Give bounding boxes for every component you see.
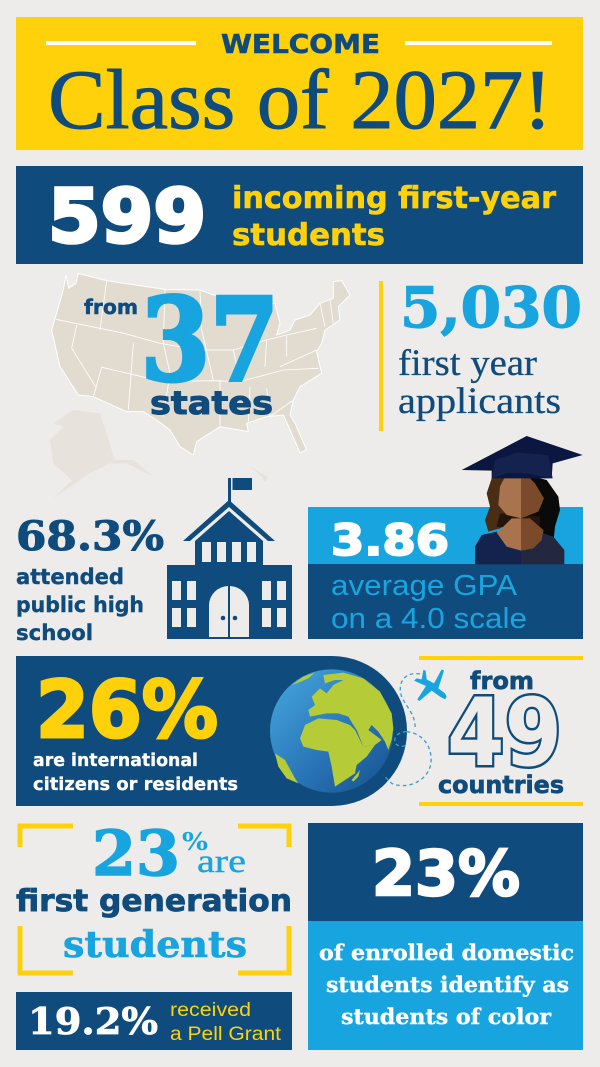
text: received a Pell Grant: received <box>170 1000 251 1021</box>
map: Hawaii <box>249 465 268 482</box>
text: of enrolled domestic students identify as students of color: students of color <box>341 1004 552 1029</box>
text: of enrolled domestic students identify as students of color <box>319 940 574 1029</box>
stat: 37: 37 <box>141 273 279 407</box>
panel: students of color <box>308 823 583 1050</box>
text: attended public high school: attended <box>16 565 124 589</box>
panel: first generation <box>16 817 292 973</box>
stat: 49 outlined: 49 <box>447 679 562 788</box>
text: incoming first-year students <box>232 181 556 253</box>
divider: applicants rule <box>379 281 383 431</box>
icon: globe <box>270 669 393 793</box>
text: from: from <box>84 295 138 319</box>
text: first year applicants: applicants <box>398 381 561 422</box>
stat: 3.86: 3.86 <box>331 516 449 566</box>
text: are: are <box>197 844 246 880</box>
text: are international citizens or residents: citizens or residents <box>33 774 238 795</box>
text: countries: countries <box>438 771 564 799</box>
stat: 68.3%: 68.3% <box>16 513 164 560</box>
frame: yellow brackets <box>20 826 289 973</box>
panel: public high school <box>16 478 292 645</box>
icon: graduate student <box>462 436 583 564</box>
panel: 599 incoming students <box>16 166 583 264</box>
text: attended public high school <box>16 565 144 645</box>
icon: airplane <box>414 669 447 701</box>
panel: 5,030 applicants <box>398 275 582 422</box>
stat: 23%: 23% <box>372 837 520 910</box>
text: received a Pell Grant <box>170 1000 282 1045</box>
map: United States <box>52 273 350 455</box>
panel: title banner <box>16 17 583 150</box>
panel: 49 countries <box>419 656 583 806</box>
icon: dashed flight path <box>383 674 431 786</box>
text: first year applicants <box>398 343 561 422</box>
text: incoming first-year students: students <box>232 218 385 253</box>
text: from: from <box>470 667 534 695</box>
map: Alaska <box>50 410 153 498</box>
panel: international citizens <box>16 656 407 806</box>
stat: 5,030: 5,030 <box>400 275 582 341</box>
text: average GPA on a 4.0 scale <box>331 570 527 635</box>
panel: Pell Grant <box>16 992 292 1050</box>
title: class of 2027: Class of 2027! <box>48 53 552 147</box>
text: incoming first-year students: incoming first-year <box>232 181 556 216</box>
text: of enrolled domestic students identify as students of color: of enrolled domestic <box>319 940 574 965</box>
text: attended public high school: public high <box>16 593 144 617</box>
text: average GPA on a 4.0 scale: average GPA <box>331 570 518 602</box>
stat: 599: 599 <box>48 174 206 260</box>
text: received a Pell Grant: a Pell Grant <box>170 1024 282 1045</box>
panel: first generation: % <box>182 827 208 856</box>
panel: 37 states map <box>50 273 350 498</box>
stat: 23%: 23 <box>92 817 180 890</box>
text: average GPA on a 4.0 scale: on a 4.0 scale <box>331 603 527 635</box>
text: of enrolled domestic students identify as students of color: students identify as <box>326 972 569 997</box>
icon: school building <box>167 478 292 639</box>
text: are international citizens or residents: are international <box>33 750 198 771</box>
stat: 19.2%: 19.2% <box>28 1001 158 1043</box>
text: states: states <box>150 384 273 422</box>
text: are international citizens or residents <box>33 750 238 795</box>
text: attended public high school: school <box>16 621 93 645</box>
panel: average GPA <box>308 436 583 639</box>
text: students: students <box>63 924 247 966</box>
text: first year applicants: first year <box>398 343 537 384</box>
stat: 26%: 26% <box>36 666 218 756</box>
text: first generation: first generation <box>16 884 292 919</box>
heading: welcome: WELCOME <box>221 30 380 60</box>
